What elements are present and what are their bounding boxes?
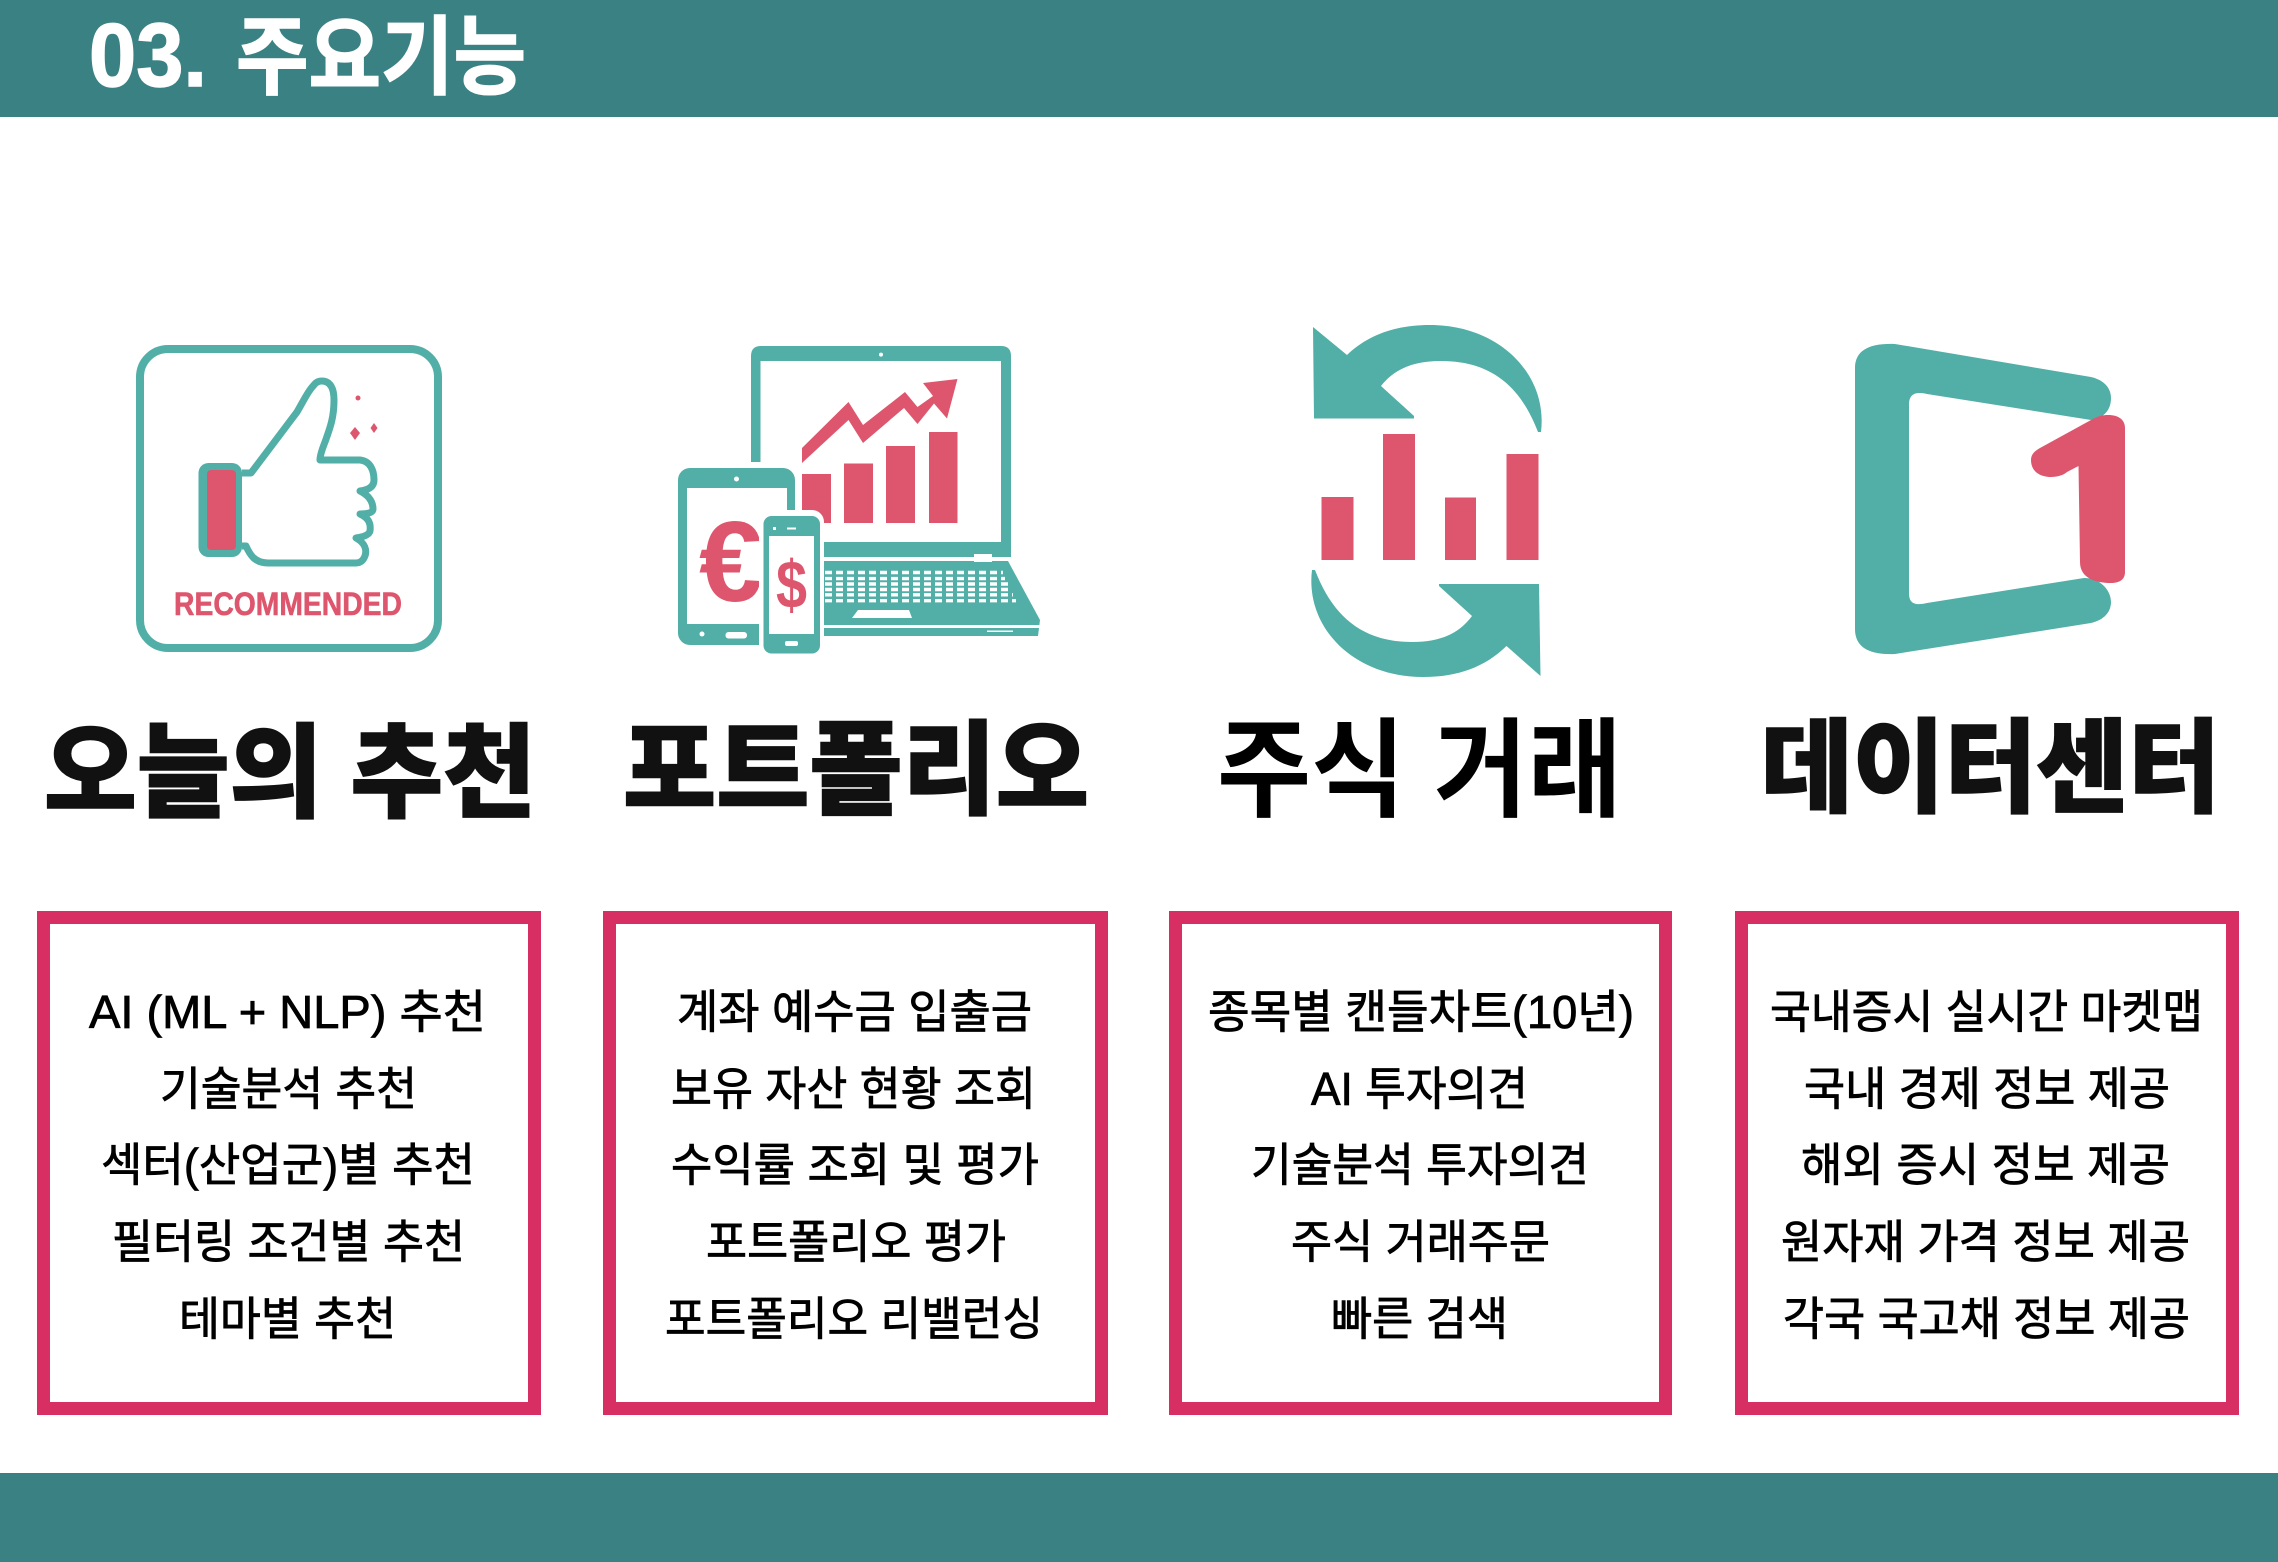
icon: stock trading cycle — [1311, 325, 1542, 677]
header band — [0, 0, 2278, 117]
dollar sign: $ — [776, 547, 807, 623]
panel: data center list: 국내 경제 정보 제공 — [1804, 1063, 2170, 1115]
panel: data center list: 해외 증시 정보 제공 — [1801, 1139, 2170, 1191]
numeral one — [2031, 415, 2125, 583]
panel: portfolio list: 포트폴리오 리밸런싱 — [665, 1293, 1043, 1345]
tablet phone — [672, 462, 800, 652]
panel: today's recommendation list: 섹터(산업군)별 추천 — [101, 1139, 475, 1191]
chart bars — [802, 432, 958, 523]
euro sign: € — [699, 499, 762, 626]
laptop keyboard — [810, 561, 1040, 636]
footer band — [0, 1473, 2278, 1562]
panel: portfolio list: 포트폴리오 평가 — [706, 1216, 1006, 1268]
title: 03. — [89, 6, 207, 106]
panel: data center list — [1742, 918, 2232, 1408]
panel: today's recommendation list: 테마별 추천 — [179, 1293, 396, 1345]
panel: stock trading list: 주식 거래주문 — [1291, 1216, 1550, 1268]
rising trend arrow — [802, 379, 958, 463]
label: recommended: RECOMMENDED — [174, 586, 402, 622]
panel: data center list: 국내증시 실시간 마켓맵 — [1770, 986, 2203, 1038]
icon: data center D1 logo — [1855, 344, 2125, 654]
panel: today's recommendation list — [44, 918, 534, 1408]
panel: portfolio list: 수익률 조회 및 평가 — [671, 1139, 1039, 1191]
icon: devices with finance chart — [672, 346, 1040, 658]
panel: portfolio list — [610, 918, 1102, 1408]
panel: data center list: 원자재 가격 정보 제공 — [1781, 1216, 2190, 1268]
panel: stock trading list: 기술분석 투자의견 — [1251, 1139, 1589, 1191]
thumb cuff — [198, 463, 242, 557]
panel: data center list: 각국 국고채 정보 제공 — [1783, 1293, 2190, 1345]
panel: stock trading list: AI 투자의견 — [1311, 1063, 1528, 1115]
thumb outline — [242, 381, 374, 563]
sparkle dots — [356, 396, 360, 400]
title: 주요기능 — [236, 10, 526, 106]
heading: today's recommendation: 오늘의 추천 — [44, 717, 536, 831]
bars — [1322, 434, 1538, 560]
icon: recommended thumbs up — [140, 349, 438, 648]
laptop screen — [751, 346, 1011, 557]
heading: portfolio: 포트폴리오 — [623, 714, 1089, 828]
panel: stock trading list: 빠른 검색 — [1331, 1293, 1508, 1345]
panel: stock trading list — [1176, 918, 1666, 1408]
heading: data center: 데이터센터 — [1761, 712, 2220, 826]
panel: today's recommendation list: 기술분석 추천 — [160, 1063, 417, 1115]
panel: portfolio list: 계좌 예수금 입출금 — [677, 986, 1032, 1038]
panel: stock trading list: 종목별 캔들차트(10년) — [1208, 986, 1634, 1038]
panel: today's recommendation list: 필터링 조건별 추천 — [112, 1216, 465, 1268]
panel: today's recommendation list: AI (ML + NLP) 추천 — [89, 986, 486, 1038]
D shape — [1855, 344, 2111, 654]
heading: stock trading: 주식 거래 — [1217, 710, 1622, 831]
top arrow — [1313, 325, 1542, 432]
bottom arrow — [1311, 570, 1540, 677]
panel: portfolio list: 보유 자산 현황 조회 — [671, 1063, 1036, 1115]
small phone — [759, 510, 824, 658]
